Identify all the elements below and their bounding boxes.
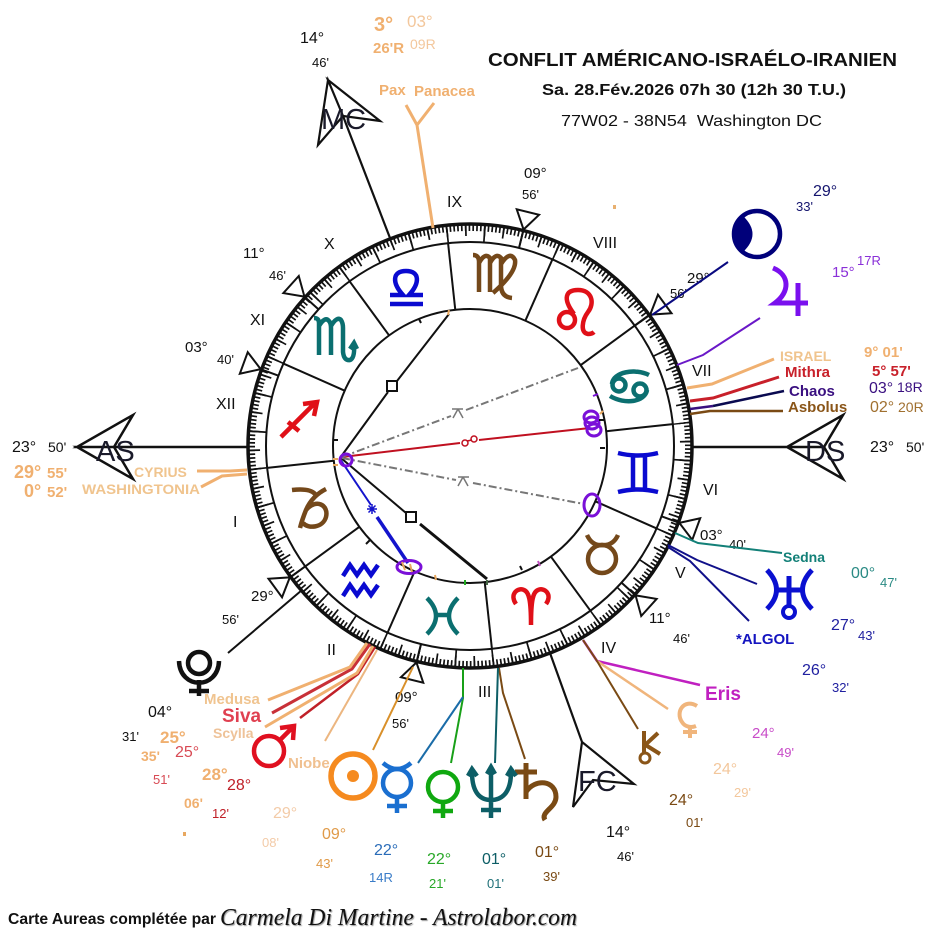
planet: Jupiter: 15° bbox=[832, 264, 855, 281]
icon: aries bbox=[513, 589, 549, 625]
point: Pax Panacea: Panacea bbox=[414, 83, 476, 100]
point: Sedna bbox=[675, 533, 897, 590]
asteroid: Niobe: 08' bbox=[262, 835, 279, 850]
quincunx aspect lower bbox=[342, 458, 584, 504]
point: Chaos: 18R bbox=[897, 379, 923, 395]
house numerals: VI bbox=[703, 482, 718, 499]
icon: libra bbox=[390, 271, 423, 304]
planet: Pluto: 04° bbox=[148, 704, 172, 721]
star: Algol: *ALGOL bbox=[736, 631, 794, 648]
house numerals: VIII bbox=[593, 235, 617, 252]
small orange dot bottom bbox=[183, 832, 186, 836]
point: Cyrius and Washingtonia: WASHINGTONIA bbox=[82, 481, 200, 497]
planet: Mars: 12' bbox=[212, 806, 229, 821]
point: Chaos bbox=[690, 379, 923, 409]
point: Israel bbox=[687, 344, 903, 388]
square aspect lower bbox=[341, 458, 487, 579]
point: Pax Panacea: Pax bbox=[379, 82, 406, 99]
sextile aspect bbox=[340, 459, 408, 563]
point: Eris: 24° bbox=[752, 725, 775, 742]
planet: Sun: 09° bbox=[322, 826, 346, 843]
icon: sagittarius bbox=[281, 402, 317, 437]
house cusp degrees: 56' bbox=[222, 612, 239, 627]
planet: Chiron bbox=[583, 640, 703, 830]
angle: midheaven MC bbox=[300, 30, 390, 238]
signature: Carmela Di Martine - Astrolabor.com bbox=[220, 905, 577, 931]
planet: Uranus: 43' bbox=[858, 628, 875, 643]
house cusp degrees: 03° bbox=[185, 339, 208, 356]
asteroid: Ceres-like glyph: 29' bbox=[734, 785, 751, 800]
point: Pax Panacea: 26'R bbox=[373, 40, 404, 57]
planet: Neptune: 01' bbox=[487, 876, 504, 891]
point: Cyrius and Washingtonia: 55' bbox=[47, 465, 67, 482]
planet position ticks on inner circle bbox=[333, 310, 605, 585]
house numerals: II bbox=[327, 642, 336, 659]
point: Cyrius and Washingtonia: 0° bbox=[24, 481, 41, 501]
title block bbox=[488, 49, 897, 130]
icon: taurus bbox=[587, 535, 618, 573]
planet: Venus: 22° bbox=[427, 851, 451, 868]
planet: Uranus bbox=[668, 545, 875, 643]
asteroid: Ceres-like glyph bbox=[597, 661, 751, 800]
planet: Neptune bbox=[468, 668, 516, 891]
point: Mithra: Mithra bbox=[785, 364, 831, 381]
icon: cancer bbox=[610, 372, 649, 401]
date line: Sa. 28.Fév.2026 07h 30 (12h 30 T.U.) bbox=[542, 82, 846, 99]
planet: Mercury bbox=[369, 697, 463, 885]
angle: imum coeli FC: FC bbox=[578, 766, 617, 798]
point: Sedna: 00° bbox=[851, 565, 875, 582]
planet: Moon: 33' bbox=[796, 199, 813, 214]
point: Chaos: 03° bbox=[869, 380, 893, 397]
planet: Moon bbox=[652, 183, 837, 315]
asteroid: Niobe: Niobe bbox=[288, 755, 330, 772]
aspect lines bbox=[340, 314, 601, 579]
point: Pax Panacea: 03° bbox=[407, 12, 433, 31]
angle: ascendant AS: 23° bbox=[12, 439, 36, 456]
house numerals: IX bbox=[447, 194, 462, 211]
house cusp degrees: 29° bbox=[687, 270, 710, 287]
point: Pax Panacea: 3° bbox=[374, 14, 393, 36]
house cusp degrees: 09° bbox=[524, 165, 547, 182]
point: Cyrius and Washingtonia: CYRIUS bbox=[134, 464, 187, 480]
point: Pax Panacea bbox=[373, 12, 476, 228]
asteroid: Scylla bbox=[184, 646, 373, 811]
asteroid: Medusa: 35' bbox=[141, 748, 160, 764]
planet: Moon: 29° bbox=[813, 183, 837, 200]
footer credit bbox=[8, 905, 577, 931]
quincunx aspect upper bbox=[342, 368, 578, 457]
house cusp degrees: 11° bbox=[649, 610, 671, 627]
planet: Chiron: 01' bbox=[686, 815, 703, 830]
asteroid: Siva bbox=[153, 644, 370, 787]
point: Mithra: 5° 57' bbox=[872, 363, 911, 380]
point: Eris: Eris bbox=[705, 684, 741, 705]
house cusp degrees: 29° bbox=[251, 588, 274, 605]
point: Asbolus bbox=[690, 399, 924, 416]
house numerals: XII bbox=[216, 396, 236, 413]
asteroid: Medusa bbox=[141, 643, 367, 764]
stellium rings bbox=[340, 411, 601, 574]
angle: descendant DS: 23° bbox=[870, 439, 894, 456]
house numerals: I bbox=[233, 514, 237, 531]
square aspect upper bbox=[340, 314, 449, 458]
house cusp degrees: 56' bbox=[522, 187, 539, 202]
point: Eris: 49' bbox=[777, 745, 794, 760]
house cusp degrees: 46' bbox=[269, 268, 286, 283]
icon: scorpio bbox=[314, 318, 357, 360]
heading: CONFLIT AMÉRICANO-ISRAÉLO-IRANIEN bbox=[488, 49, 897, 70]
planet: Saturn: 01° bbox=[535, 844, 559, 861]
planet: Venus bbox=[427, 668, 463, 891]
planet: Pluto: 31' bbox=[122, 729, 139, 744]
point: Chaos: Chaos bbox=[789, 383, 835, 400]
icon: pisces bbox=[427, 598, 458, 634]
opposition aspect bbox=[342, 428, 590, 457]
angle: ascendant AS: AS bbox=[96, 436, 135, 468]
asteroid: Medusa: Medusa bbox=[204, 691, 261, 708]
icon: leo bbox=[559, 290, 594, 334]
point: Eris bbox=[583, 640, 794, 760]
angle: midheaven MC: 46' bbox=[312, 55, 329, 70]
angle: imum coeli FC: 14° bbox=[606, 824, 630, 841]
planet: Sun bbox=[316, 667, 413, 871]
planet: Saturn bbox=[499, 668, 560, 884]
star: Algol: 26° bbox=[802, 662, 826, 679]
asteroid: Scylla: 28° bbox=[202, 765, 228, 784]
location line: 77W02 - 38N54 Washington DC bbox=[561, 113, 822, 130]
icon: capricorn bbox=[292, 489, 326, 528]
asteroid: Medusa: 25° bbox=[160, 728, 186, 747]
point: Pax Panacea: 09R bbox=[410, 36, 436, 52]
house cusp degrees: 03° bbox=[700, 527, 723, 544]
zodiac signs bbox=[281, 255, 658, 634]
house numerals: X bbox=[324, 236, 335, 253]
star: Algol: 32' bbox=[832, 680, 849, 695]
house numerals: IV bbox=[601, 640, 616, 657]
house cusp triangles bbox=[240, 209, 700, 683]
angle: midheaven MC: 14° bbox=[300, 30, 324, 47]
planet: Mercury: 14R bbox=[369, 870, 393, 885]
angle: imum coeli FC: 46' bbox=[617, 849, 634, 864]
asteroid: Siva: Siva bbox=[222, 706, 262, 727]
planet: Mercury: 22° bbox=[374, 842, 398, 859]
planet: Mars: 28° bbox=[227, 777, 251, 794]
point: Mithra bbox=[690, 363, 911, 401]
point: Cyrius and Washingtonia: 29° bbox=[14, 462, 41, 482]
planet: Venus: 21' bbox=[429, 876, 446, 891]
house cusp degrees: 40' bbox=[217, 352, 234, 367]
small orange dot top bbox=[613, 205, 616, 209]
angle: ascendant AS: 50' bbox=[48, 439, 66, 455]
house cusp degrees: 11° bbox=[243, 245, 265, 262]
planet: Jupiter bbox=[677, 253, 881, 365]
house cusps and numerals bbox=[185, 165, 746, 731]
house numerals: VII bbox=[692, 363, 712, 380]
point: Asbolus: 20R bbox=[898, 399, 924, 415]
asteroid: Niobe bbox=[262, 650, 377, 850]
planet: Chiron: 24° bbox=[669, 792, 693, 809]
icon: gemini bbox=[618, 453, 658, 492]
asteroid: Siva: 51' bbox=[153, 772, 170, 787]
planet: Mars bbox=[212, 647, 375, 821]
house cusp degrees: 56' bbox=[392, 716, 409, 731]
point: Asbolus: 02° bbox=[870, 399, 894, 416]
point: Sedna: Sedna bbox=[783, 549, 825, 565]
angle: imum coeli FC bbox=[550, 653, 634, 864]
icon: aquarius bbox=[343, 565, 378, 596]
asteroid: Scylla: Scylla bbox=[213, 725, 254, 741]
point: Israel: 9° 01' bbox=[864, 344, 903, 361]
house numerals: V bbox=[675, 565, 686, 582]
house cusp degrees: 40' bbox=[729, 537, 746, 552]
point: Cyrius and Washingtonia: 52' bbox=[47, 484, 67, 501]
house numerals: III bbox=[478, 684, 491, 701]
angle: descendant DS: 50' bbox=[906, 439, 924, 455]
zodiac wheel bbox=[229, 205, 711, 687]
house cusp degrees: 46' bbox=[673, 631, 690, 646]
point: Sedna: 47' bbox=[880, 575, 897, 590]
house cusp degrees: 09° bbox=[395, 689, 418, 706]
point: Israel: ISRAEL bbox=[780, 348, 832, 364]
star: Algol bbox=[668, 547, 849, 695]
angle: midheaven MC: MC bbox=[321, 104, 366, 136]
house cusp degrees bbox=[185, 165, 746, 731]
planet: Saturn: 39' bbox=[543, 869, 560, 884]
point: Cyrius and Washingtonia bbox=[14, 462, 247, 501]
house numerals bbox=[216, 194, 718, 701]
point: Asbolus: Asbolus bbox=[788, 399, 847, 416]
house numerals: XI bbox=[250, 312, 265, 329]
asteroid: Niobe: 29° bbox=[273, 805, 297, 822]
asteroid: Scylla: 06' bbox=[184, 795, 203, 811]
planet: Neptune: 01° bbox=[482, 851, 506, 868]
house cusp degrees: 56' bbox=[670, 286, 687, 301]
asteroid: Ceres-like glyph: 24° bbox=[713, 761, 737, 778]
credit label: Carte Aureas complétée par bbox=[8, 911, 216, 928]
asteroid: Siva: 25° bbox=[175, 744, 199, 761]
planet: Jupiter: 17R bbox=[857, 253, 881, 268]
planet: Pluto bbox=[122, 590, 302, 744]
angle: ascendant AS bbox=[12, 415, 247, 479]
planet: Sun: 43' bbox=[316, 856, 333, 871]
angle: descendant DS: DS bbox=[805, 436, 845, 468]
planet: Uranus: 27° bbox=[831, 617, 855, 634]
icon: virgo bbox=[473, 255, 515, 298]
angle: descendant DS bbox=[693, 415, 924, 479]
